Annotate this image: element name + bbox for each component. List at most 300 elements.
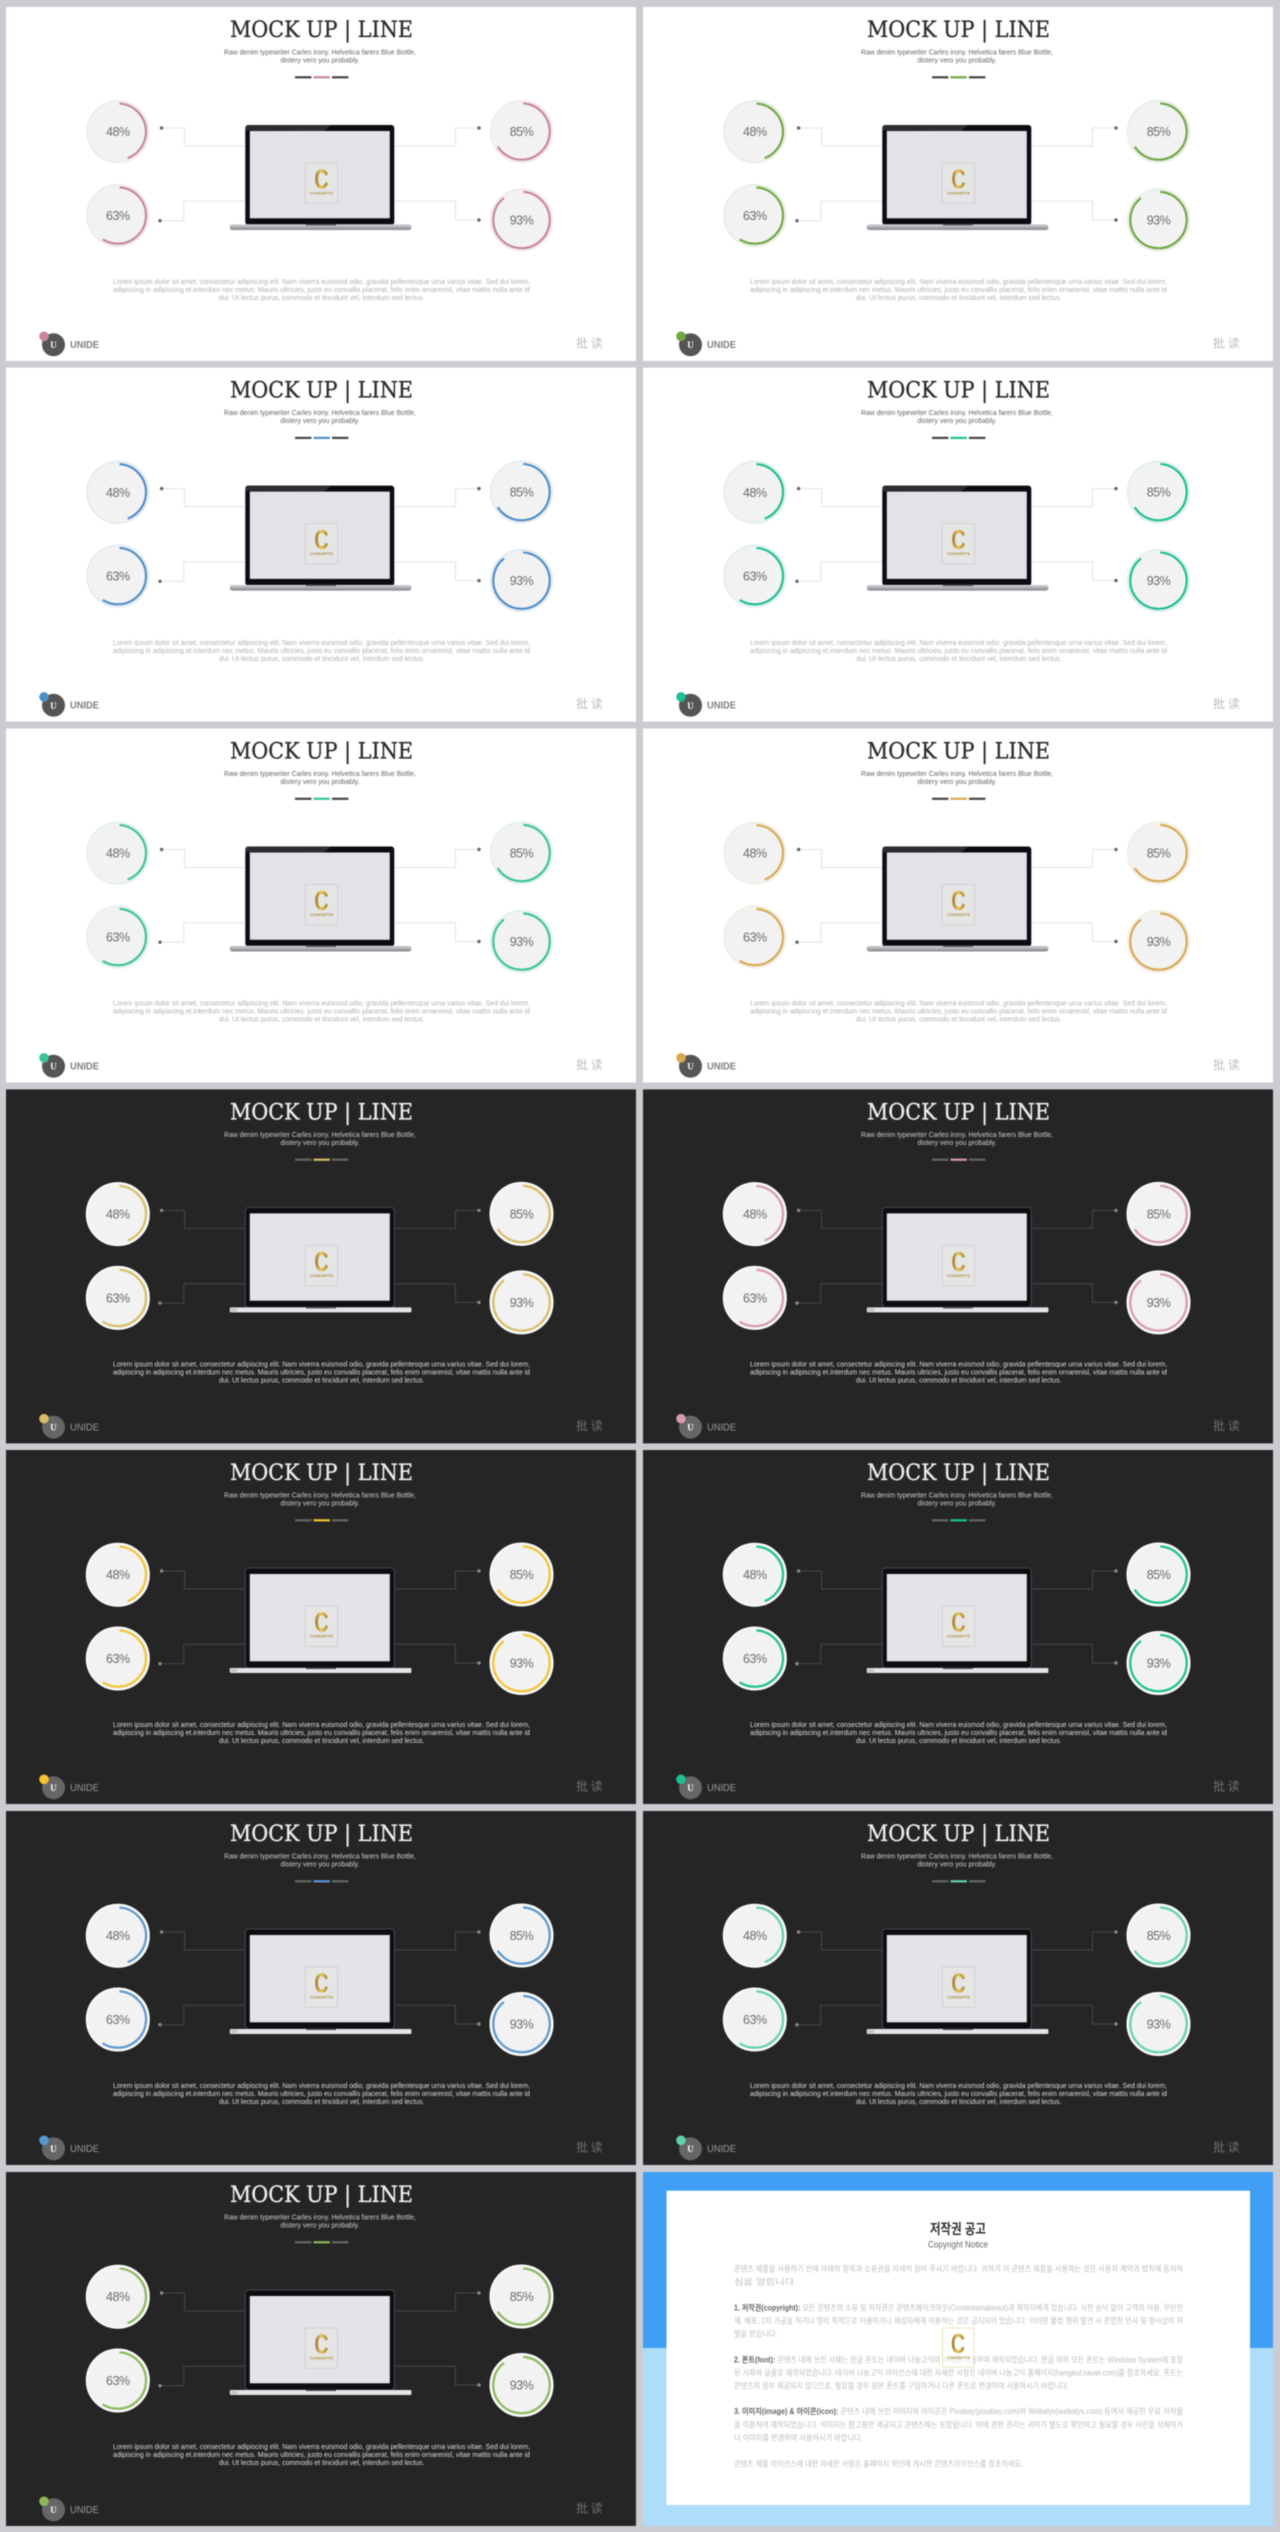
body text: dui. Ut lectus purus, commodo et tincidunt vel, interdum sed lectus.: [219, 2097, 424, 2106]
connector 93%: [395, 1644, 481, 1665]
gauge 93%: 93%: [1147, 935, 1171, 949]
subtitle: Raw denim typewriter Carles irony. Helvetica farers Blue Bottle,: [224, 2212, 416, 2222]
connector 48%: [160, 126, 245, 146]
footer logo: [39, 2496, 99, 2521]
divider: [295, 798, 348, 800]
gauge 63%: [86, 1267, 149, 1329]
footer label: 批 读: [576, 2138, 603, 2156]
connector 85%: [1032, 126, 1118, 146]
laptop: [867, 846, 1048, 952]
slide 4: light teal: [643, 368, 1273, 722]
body text: adipiscing in adipiscing et.interdum nec metus. Mauris ultricies, justo eu convallis placerat, felis enim ornarenisl, vitae mattis nulla ante id: [113, 1007, 530, 1016]
copyright heading: 저작권 공고: [930, 2221, 986, 2237]
slide 10: dark teal: [643, 1450, 1273, 1804]
subtitle: [224, 408, 416, 425]
body text: dui. Ut lectus purus, commodo et tincidunt vel, interdum sed lectus.: [856, 654, 1062, 663]
screen logo card: C: [952, 1968, 966, 1998]
screen logo card: [305, 2328, 338, 2368]
body text: [750, 638, 1167, 663]
connector 63%: [158, 1284, 245, 1305]
connector 85%: [395, 126, 481, 146]
title: MOCK UP | LINE: [230, 18, 413, 43]
copyright section 1: [734, 2302, 1183, 2338]
subtitle: Raw denim typewriter Carles irony. Helvetica farers Blue Bottle,: [224, 408, 416, 417]
footer logo: [676, 2136, 736, 2160]
body text: adipiscing in adipiscing et.interdum nec metus. Mauris ultricies, justo eu convallis placerat, felis enim ornarenisl, vitae mattis nulla ante id: [113, 2089, 530, 2098]
gauge 93%: 93%: [510, 1656, 534, 1670]
gauge 93%: [490, 910, 552, 972]
footer logo: U: [687, 2144, 694, 2154]
gauge 93%: 93%: [510, 574, 534, 588]
body text: adipiscing in adipiscing et.interdum nec metus. Mauris ultricies, justo eu convallis placerat, felis enim ornarenisl, vitae mattis nulla ante id: [113, 285, 530, 294]
divider: [932, 798, 985, 800]
footer logo: U: [687, 1423, 694, 1433]
screen logo card: C: [952, 524, 966, 555]
subtitle: [861, 1490, 1053, 1508]
body text: Lorem ipsum dolor sit amet, consectetur adipiscing elit. Nam viverra euismod odio, gravida pellentesque urna varius vitae. Sed dui lorem,: [113, 999, 530, 1008]
gauge 93%: 93%: [1147, 1656, 1171, 1670]
gauge 93%: [1128, 550, 1190, 612]
connector 48%: [797, 1930, 882, 1950]
footer logo: UNIDE: [707, 340, 736, 351]
gauge 63%: 63%: [106, 1291, 130, 1305]
connector 85%: [1032, 1569, 1118, 1589]
gauge 85%: 85%: [1147, 846, 1171, 860]
gauge 63%: 63%: [743, 1291, 767, 1305]
footer label: 批 读: [1213, 1056, 1240, 1073]
laptop: [867, 125, 1048, 230]
copyright intro: 심을 알립니다.: [734, 2276, 797, 2286]
connector 48%: [160, 1930, 245, 1950]
screen logo card: C: [314, 164, 328, 194]
screen logo card: [942, 1606, 975, 1646]
gauge 63%: [724, 184, 786, 246]
screen logo card: [305, 884, 338, 925]
gauge 93%: 93%: [1147, 574, 1171, 588]
footer label: 批 读: [1213, 1778, 1240, 1794]
body text: Lorem ipsum dolor sit amet, consectetur adipiscing elit. Nam viverra euismod odio, gravida pellentesque urna varius vitae. Sed dui lorem,: [750, 2081, 1167, 2090]
screen logo card: [942, 884, 975, 925]
gauge 48%: 48%: [743, 125, 767, 139]
footer logo: [676, 1053, 736, 1078]
laptop: [230, 1207, 411, 1312]
connector 63%: [795, 1644, 882, 1665]
divider: [295, 2241, 348, 2243]
subtitle: [861, 48, 1053, 64]
body text: [750, 2081, 1167, 2106]
gauge 85%: [1128, 822, 1190, 884]
gauge 85%: [490, 1543, 553, 1606]
gauge 48%: [724, 1904, 786, 1967]
gauge 85%: 85%: [1147, 486, 1171, 500]
footer logo: UNIDE: [707, 701, 736, 712]
screen logo card: CONCEPTS: [310, 551, 333, 556]
title: MOCK UP | LINE: [867, 1461, 1050, 1486]
footer logo: [39, 1414, 99, 1439]
slide 13: dark green: [6, 2172, 636, 2526]
copyright section 3: [734, 2406, 1183, 2442]
title: MOCK UP | LINE: [230, 2183, 413, 2208]
subtitle: Raw denim typewriter Carles irony. Helvetica farers Blue Bottle,: [861, 408, 1053, 417]
screen logo card: C: [952, 164, 966, 194]
body text: Lorem ipsum dolor sit amet, consectetur adipiscing elit. Nam viverra euismod odio, gravida pellentesque urna varius vitae. Sed dui lorem,: [750, 1720, 1167, 1729]
subtitle: Raw denim typewriter Carles irony. Helvetica farers Blue Bottle,: [224, 769, 416, 778]
gauge 93%: 93%: [1147, 1296, 1171, 1310]
footer logo: UNIDE: [70, 340, 99, 351]
title: MOCK UP | LINE: [867, 18, 1050, 43]
gauge 63%: 63%: [743, 2013, 767, 2027]
body text: [750, 999, 1167, 1024]
laptop: [230, 125, 411, 230]
gauge 85%: 85%: [510, 1207, 534, 1221]
copyright section 3: 을 이용하여 제작되었습니다. 이미지는 참고용만 제공되고 콘텐츠에는 포함됩니다. 이에 관한 권리는 귀하가 별도로 확인하고 필요할 경우 사진을 삭제하거: [734, 2419, 1183, 2429]
screen logo card: CONCEPTS: [947, 912, 970, 917]
subtitle: distery vero you probably.: [918, 1860, 997, 1868]
gauge 85%: [490, 1904, 553, 1967]
gauge 48%: [86, 1543, 149, 1606]
footer logo: U: [687, 701, 694, 711]
connector 93%: [395, 2005, 481, 2026]
gauge 93%: 93%: [1147, 2018, 1171, 2032]
gauge 48%: [86, 2265, 149, 2328]
gauge 63%: 63%: [743, 930, 767, 944]
screen logo card: C: [314, 1606, 328, 1638]
connector 63%: [795, 2005, 882, 2026]
laptop: [230, 846, 411, 952]
laptop: [230, 1929, 411, 2034]
gauge 93%: 93%: [510, 1296, 534, 1310]
body text: adipiscing in adipiscing et.interdum nec metus. Mauris ultricies, justo eu convallis placerat, felis enim ornarenisl, vitae mattis nulla ante id: [113, 2450, 530, 2459]
connector 85%: [395, 2291, 481, 2311]
gauge 85%: [1127, 1543, 1190, 1606]
connector 63%: [158, 201, 245, 222]
gauge 48%: [86, 1904, 149, 1967]
body text: Lorem ipsum dolor sit amet, consectetur adipiscing elit. Nam viverra euismod odio, gravida pellentesque urna varius vitae. Sed dui lorem,: [750, 1360, 1167, 1369]
gauge 48%: [724, 822, 786, 884]
gauge 85%: 85%: [510, 2290, 534, 2304]
footer logo: [676, 1774, 736, 1799]
screen logo card: CONCEPTS: [947, 190, 970, 196]
slide 7: dark gold: [6, 1089, 636, 1443]
body text: adipiscing in adipiscing et.interdum nec metus. Mauris ultricies, justo eu convallis placerat, felis enim ornarenisl, vitae mattis nulla ante id: [750, 1368, 1167, 1377]
body text: adipiscing in adipiscing et.interdum nec metus. Mauris ultricies, justo eu convallis placerat, felis enim ornarenisl, vitae mattis nulla ante id: [113, 1368, 530, 1377]
copyright section 3: 나 이미지를 변경하여 사용하시기 바랍니다.: [734, 2432, 862, 2442]
gauge 63%: 63%: [106, 1652, 130, 1666]
slide 6: light gold: [643, 728, 1273, 1082]
copyright logo card: C: [951, 2328, 965, 2359]
copyright intro: [734, 2264, 1184, 2286]
gauge 48%: 48%: [106, 1929, 130, 1943]
screen logo card: CONCEPTS: [310, 2356, 333, 2360]
footer logo: UNIDE: [70, 1422, 99, 1433]
title: MOCK UP | LINE: [230, 1822, 413, 1847]
footer logo: UNIDE: [70, 1783, 99, 1794]
footer label: 批 读: [1213, 695, 1240, 712]
footer logo: UNIDE: [70, 2144, 99, 2155]
screen logo card: CONCEPTS: [947, 1273, 970, 1278]
gauge 93%: 93%: [510, 935, 534, 949]
body text: adipiscing in adipiscing et.interdum nec metus. Mauris ultricies, justo eu convallis placerat, felis enim ornarenisl, vitae mattis nulla ante id: [113, 646, 530, 655]
laptop: [867, 1207, 1048, 1312]
gauge 48%: 48%: [743, 1208, 767, 1222]
connector 85%: [1032, 1930, 1118, 1950]
subtitle: [861, 1130, 1053, 1147]
gauge 63%: 63%: [106, 2374, 130, 2388]
subtitle: [224, 1852, 416, 1868]
gauge 48%: [87, 461, 149, 523]
gauge 48%: [724, 1183, 786, 1245]
footer logo: [676, 332, 736, 356]
connector 48%: [797, 126, 882, 146]
screen logo card: [305, 163, 338, 203]
slide 5: light mint: [6, 728, 636, 1082]
divider: [932, 437, 985, 439]
gauge 93%: [1128, 910, 1190, 972]
subtitle: distery vero you probably.: [280, 56, 360, 64]
footer logo: [39, 2136, 99, 2160]
copyright section 1: 1. 저작권(copyright): 모든 콘텐츠의 소유 및 저작권은 콘텐츠메이크아웃(Contentsmakeout)과 제작자에게 있습니다. 사전 승낙 없이 고객의 이용, 무단전: [734, 2302, 1183, 2312]
screen logo card: CONCEPTS: [310, 1273, 333, 1278]
screen logo card: [305, 524, 338, 564]
copyright closing line: 콘텐츠 제품 라이선스에 대한 자세한 사항은 홈페이지 하단에 게시한 콘텐츠라이선스를 참조하세요.: [734, 2458, 1023, 2468]
body text: dui. Ut lectus purus, commodo et tincidunt vel, interdum sed lectus.: [856, 2097, 1062, 2106]
copyright section 2: 콘텐츠의 일부 제공되지 않으므로, 필요할 경우 원본 폰트를 구입하거나 다른 폰트로 변경하여 사용하시기 바랍니다.: [734, 2380, 1069, 2390]
body text: [113, 2081, 530, 2106]
gauge 48%: [87, 101, 149, 163]
gauge 63%: [87, 545, 149, 607]
connector 93%: [1032, 923, 1118, 943]
subtitle: Raw denim typewriter Carles irony. Helvetica farers Blue Bottle,: [224, 1852, 416, 1860]
screen logo card: [942, 524, 975, 564]
body text: Lorem ipsum dolor sit amet, consectetur adipiscing elit. Nam viverra euismod odio, gravida pellentesque urna varius vitae. Sed dui lorem,: [750, 277, 1167, 286]
divider: [295, 437, 348, 439]
footer logo: [39, 692, 99, 717]
connector 93%: [395, 2366, 481, 2387]
subtitle: Raw denim typewriter Carles irony. Helvetica farers Blue Bottle,: [861, 48, 1053, 56]
subtitle: distery vero you probably.: [918, 56, 997, 64]
connector 85%: [395, 1930, 481, 1950]
body text: Lorem ipsum dolor sit amet, consectetur adipiscing elit. Nam viverra euismod odio, gravida pellentesque urna varius vitae. Sed dui lorem,: [113, 1360, 530, 1369]
body text: adipiscing in adipiscing et.interdum nec metus. Mauris ultricies, justo eu convallis placerat, felis enim ornarenisl, vitae mattis nulla ante id: [750, 646, 1167, 655]
slide 12: dark mint: [643, 1811, 1273, 2165]
laptop: [230, 486, 411, 591]
subtitle: Raw denim typewriter Carles irony. Helvetica farers Blue Bottle,: [224, 1490, 416, 1500]
body text: adipiscing in adipiscing et.interdum nec metus. Mauris ultricies, justo eu convallis placerat, felis enim ornarenisl, vitae mattis nulla ante id: [750, 1007, 1167, 1016]
title: MOCK UP | LINE: [230, 1100, 413, 1125]
body text: adipiscing in adipiscing et.interdum nec metus. Mauris ultricies, justo eu convallis placerat, felis enim ornarenisl, vitae mattis nulla ante id: [750, 2089, 1167, 2098]
connector 48%: [160, 1209, 245, 1228]
screen logo card: [942, 163, 975, 203]
gauge 93%: [1127, 1632, 1190, 1694]
screen logo card: [942, 1245, 975, 1286]
gauge 48%: 48%: [743, 1568, 767, 1582]
footer label: 批 读: [576, 1056, 603, 1073]
gauge 63%: [724, 906, 786, 968]
footer label: 批 读: [576, 1778, 603, 1794]
screen logo card: C: [314, 885, 328, 916]
subtitle: Raw denim typewriter Carles irony. Helvetica farers Blue Bottle,: [861, 1852, 1053, 1860]
connector 85%: [1032, 487, 1118, 507]
copyright section 2: 된 서체와 글꼴로 제작되었습니다. 네이버 나눔고딕 라이선스에 대한 자세한 사항은 네이버 나눔고딕 홈페이지(hangeul.naver.com)를 참조하세요. 폰트는: [734, 2368, 1183, 2378]
copyright section 2: 2. 폰트(font): 콘텐츠 내에 쓰인 서체는 한글 폰트는 네이버 나눔고딕의 서체를 사용하여 제작되었습니다. 한글 외의 모든 폰트는 Windows System에 포함: [734, 2354, 1184, 2364]
gauge 63%: 63%: [106, 2013, 130, 2027]
connector 63%: [795, 562, 882, 583]
gauge 85%: [1127, 1904, 1190, 1967]
screen logo card: [305, 1245, 338, 1286]
body text: dui. Ut lectus purus, commodo et tincidunt vel, interdum sed lectus.: [219, 1736, 424, 1745]
footer logo: [676, 692, 736, 717]
gauge 48%: [86, 1183, 149, 1245]
body text: dui. Ut lectus purus, commodo et tincidunt vel, interdum sed lectus.: [219, 1015, 424, 1024]
screen logo card: CONCEPTS: [947, 1994, 970, 2000]
body text: adipiscing in adipiscing et.interdum nec metus. Mauris ultricies, justo eu convallis placerat, felis enim ornarenisl, vitae mattis nulla ante id: [750, 285, 1167, 294]
footer logo: UNIDE: [707, 1783, 736, 1794]
screen logo card: CONCEPTS: [310, 1994, 333, 2000]
title: MOCK UP | LINE: [867, 379, 1050, 404]
footer logo: U: [50, 701, 57, 711]
subtitle: distery vero you probably.: [918, 1498, 997, 1508]
subtitle: [224, 1490, 416, 1508]
footer logo: U: [50, 340, 57, 350]
footer logo: [39, 332, 99, 356]
gauge 85%: [1128, 100, 1190, 162]
body text: dui. Ut lectus purus, commodo et tincidunt vel, interdum sed lectus.: [856, 1736, 1062, 1745]
gauge 63%: 63%: [106, 570, 130, 584]
connector 63%: [158, 562, 245, 583]
gauge 85%: [490, 2265, 553, 2328]
footer logo: U: [687, 1062, 694, 1072]
footer logo: [39, 1053, 99, 1078]
subtitle: Raw denim typewriter Carles irony. Helvetica farers Blue Bottle,: [861, 1490, 1053, 1500]
body text: [113, 277, 530, 302]
screen logo card: C: [314, 1968, 328, 1998]
gauge 63%: 63%: [743, 570, 767, 584]
body text: Lorem ipsum dolor sit amet, consectetur adipiscing elit. Nam viverra euismod odio, gravida pellentesque urna varius vitae. Sed dui lorem,: [113, 638, 530, 647]
copyright subheading: Copyright Notice: [928, 2240, 988, 2250]
gauge 63%: 63%: [106, 930, 130, 944]
gauge 63%: 63%: [106, 209, 130, 223]
connector 85%: [395, 848, 481, 868]
gauge 93%: [490, 2354, 553, 2416]
body text: Lorem ipsum dolor sit amet, consectetur adipiscing elit. Nam viverra euismod odio, gravida pellentesque urna varius vitae. Sed dui lorem,: [750, 999, 1167, 1008]
gauge 85%: 85%: [510, 1568, 534, 1582]
footer label: 批 读: [1213, 334, 1240, 352]
footer logo: U: [687, 340, 694, 350]
gauge 93%: 93%: [510, 2018, 534, 2032]
screen logo card: [942, 1967, 975, 2007]
gauge 85%: [490, 100, 552, 162]
body text: adipiscing in adipiscing et.interdum nec metus. Mauris ultricies, justo eu convallis placerat, felis enim ornarenisl, vitae mattis nulla ante id: [750, 1728, 1167, 1737]
screen logo card: [305, 1606, 338, 1646]
panel: copyright notice: [643, 2172, 1273, 2526]
subtitle: [861, 769, 1053, 786]
connector 93%: [1032, 1644, 1118, 1665]
divider: [295, 1880, 348, 1882]
copyright logo card: CONCEPTS: [947, 2355, 970, 2360]
gauge 48%: 48%: [106, 1208, 130, 1222]
gauge 85%: [490, 822, 552, 884]
connector 48%: [797, 848, 882, 868]
gauge 85%: 85%: [510, 846, 534, 860]
connector 48%: [160, 487, 245, 507]
divider: [932, 76, 985, 78]
footer logo: U: [50, 1783, 57, 1793]
gauge 48%: 48%: [106, 486, 130, 500]
title: MOCK UP | LINE: [867, 1100, 1050, 1125]
subtitle: [224, 1130, 416, 1147]
gauge 48%: [87, 822, 149, 884]
gauge 48%: 48%: [743, 847, 767, 861]
subtitle: [861, 408, 1053, 425]
title: MOCK UP | LINE: [230, 379, 413, 404]
subtitle: distery vero you probably.: [280, 777, 360, 786]
gauge 48%: 48%: [106, 847, 130, 861]
gauge 93%: 93%: [510, 2378, 534, 2392]
footer logo: UNIDE: [707, 1422, 736, 1433]
subtitle: Raw denim typewriter Carles irony. Helvetica farers Blue Bottle,: [224, 48, 416, 56]
gauge 63%: [724, 1267, 786, 1329]
footer label: 批 读: [1213, 1417, 1240, 1434]
subtitle: distery vero you probably.: [918, 1138, 997, 1147]
gauge 85%: 85%: [1147, 1568, 1171, 1582]
slide 3: light blue: [6, 368, 636, 722]
body text: Lorem ipsum dolor sit amet, consectetur adipiscing elit. Nam viverra euismod odio, gravida pellentesque urna varius vitae. Sed dui lorem,: [113, 2442, 530, 2451]
divider: [932, 1519, 985, 1521]
footer label: 批 读: [576, 1417, 603, 1434]
body text: Lorem ipsum dolor sit amet, consectetur adipiscing elit. Nam viverra euismod odio, gravida pellentesque urna varius vitae. Sed dui lorem,: [113, 1720, 530, 1729]
subtitle: Raw denim typewriter Carles irony. Helvetica farers Blue Bottle,: [861, 1130, 1053, 1139]
gauge 85%: [490, 1183, 553, 1245]
gauge 85%: 85%: [1147, 1929, 1171, 1943]
connector 85%: [395, 487, 481, 507]
connector 93%: [1032, 201, 1118, 222]
body text: [113, 638, 530, 663]
connector 93%: [1032, 1284, 1118, 1304]
screen logo card: C: [314, 2328, 328, 2360]
footer logo: [676, 1414, 736, 1439]
gauge 93%: [490, 1993, 553, 2055]
connector 93%: [1032, 562, 1118, 582]
body text: [113, 1720, 530, 1745]
gauge 93%: [1127, 1271, 1190, 1334]
gauge 48%: 48%: [106, 2290, 130, 2304]
gauge 85%: 85%: [510, 1929, 534, 1943]
footer label: 批 读: [1213, 2138, 1240, 2156]
gauge 48%: 48%: [106, 1568, 130, 1582]
laptop: [230, 1568, 411, 1673]
screen logo card: [305, 1967, 338, 2007]
connector 85%: [395, 1569, 481, 1589]
gauge 48%: [724, 1543, 786, 1606]
connector 63%: [158, 2366, 245, 2387]
body text: [750, 277, 1167, 302]
subtitle: distery vero you probably.: [280, 1860, 360, 1868]
connector 48%: [160, 1569, 245, 1589]
gauge 85%: 85%: [510, 125, 534, 139]
footer logo: UNIDE: [70, 2505, 99, 2516]
body text: [750, 1360, 1167, 1385]
connector 48%: [160, 848, 245, 868]
gauge 93%: [490, 1271, 553, 1334]
footer label: 批 读: [576, 334, 603, 352]
body text: dui. Ut lectus purus, commodo et tincidunt vel, interdum sed lectus.: [219, 2458, 424, 2467]
gauge 63%: [724, 1627, 786, 1690]
connector 63%: [158, 2005, 245, 2026]
laptop: [867, 1568, 1048, 1673]
gauge 85%: 85%: [1147, 1207, 1171, 1221]
slide 8: dark pink: [643, 1089, 1273, 1443]
gauge 93%: [490, 189, 552, 251]
